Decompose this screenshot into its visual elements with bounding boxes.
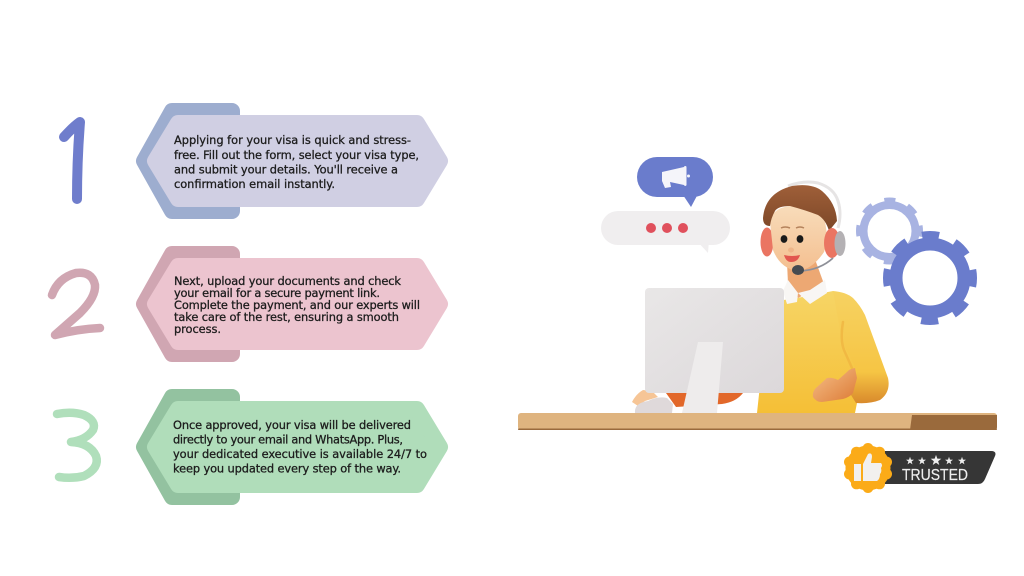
nose [788, 248, 794, 252]
badge: trusted [844, 443, 996, 493]
panel 2 text: take care of the rest, ensuring a smooth [174, 310, 399, 324]
panel 3 text: directly to your email and WhatsApp. Plus, [173, 432, 403, 446]
right ear cup [824, 228, 840, 258]
panel 1 text: and submit your details. You'll receive a [174, 162, 398, 176]
panel: step 3 [144, 397, 440, 497]
step number 1 [64, 122, 80, 199]
sweater arm [833, 291, 889, 403]
step number 3 [57, 413, 97, 478]
headband [788, 182, 840, 228]
panel 1 text: free. Fill out the form, select your visa type, [174, 148, 419, 162]
icon: large gear [880, 228, 980, 328]
panel 1 back shape [144, 111, 232, 211]
illustration: computer monitor [645, 288, 784, 413]
illustration: desk [518, 413, 997, 430]
sweater body [757, 291, 860, 413]
panel 3 back shape [144, 397, 232, 497]
mouth [784, 255, 800, 262]
panel: step 1 [144, 111, 440, 211]
badge ribbon [872, 451, 996, 484]
icon: megaphone speech bubble [637, 157, 713, 207]
headset and head [760, 182, 846, 275]
panel 3 text: keep you updated every step of the way. [173, 462, 401, 476]
panel 2 text: Complete the payment, and our experts will [174, 298, 420, 312]
icon: typing speech bubble [601, 211, 730, 253]
microphone [792, 265, 804, 275]
panel 1 front shape [155, 123, 440, 199]
panel 3 front shape [155, 409, 440, 485]
microphone boom [800, 258, 833, 271]
hair [763, 185, 837, 231]
hand gesturing [813, 368, 857, 402]
illustration: support agent [666, 182, 889, 413]
eyes [781, 235, 803, 243]
panel 2 back shape [144, 254, 232, 354]
arm behind monitor [666, 393, 743, 407]
badge label: TRUSTED [902, 467, 968, 484]
panel: step 2 [144, 254, 440, 354]
monitor stand [682, 342, 723, 413]
panel 3 text: Once approved, your visa will be delivered [173, 418, 411, 432]
panel 2 text: process. [174, 322, 221, 336]
panel 1 text: confirmation email instantly. [174, 177, 335, 191]
panel 2 text: Next, upload your documents and check [174, 274, 401, 288]
neck [787, 262, 824, 298]
illustration: mouse and left hand [632, 390, 673, 413]
icon: small gear [854, 195, 925, 267]
shirt collar [783, 280, 827, 304]
badge seal [844, 443, 892, 493]
rating stars [906, 455, 966, 465]
face [770, 206, 827, 271]
panel 2 front shape [155, 266, 440, 342]
panel 2 text: your email for a secure payment link. [174, 286, 380, 300]
left ear cup [760, 228, 774, 256]
panel 1 text: Applying for your visa is quick and stress- [174, 133, 411, 147]
eyebrows [781, 227, 804, 228]
step number 2 [52, 273, 100, 335]
arm crease [842, 322, 852, 368]
panel 3 text: your dedicated executive is available 24/7 to [173, 447, 427, 461]
icon: thumbs up [854, 453, 882, 481]
